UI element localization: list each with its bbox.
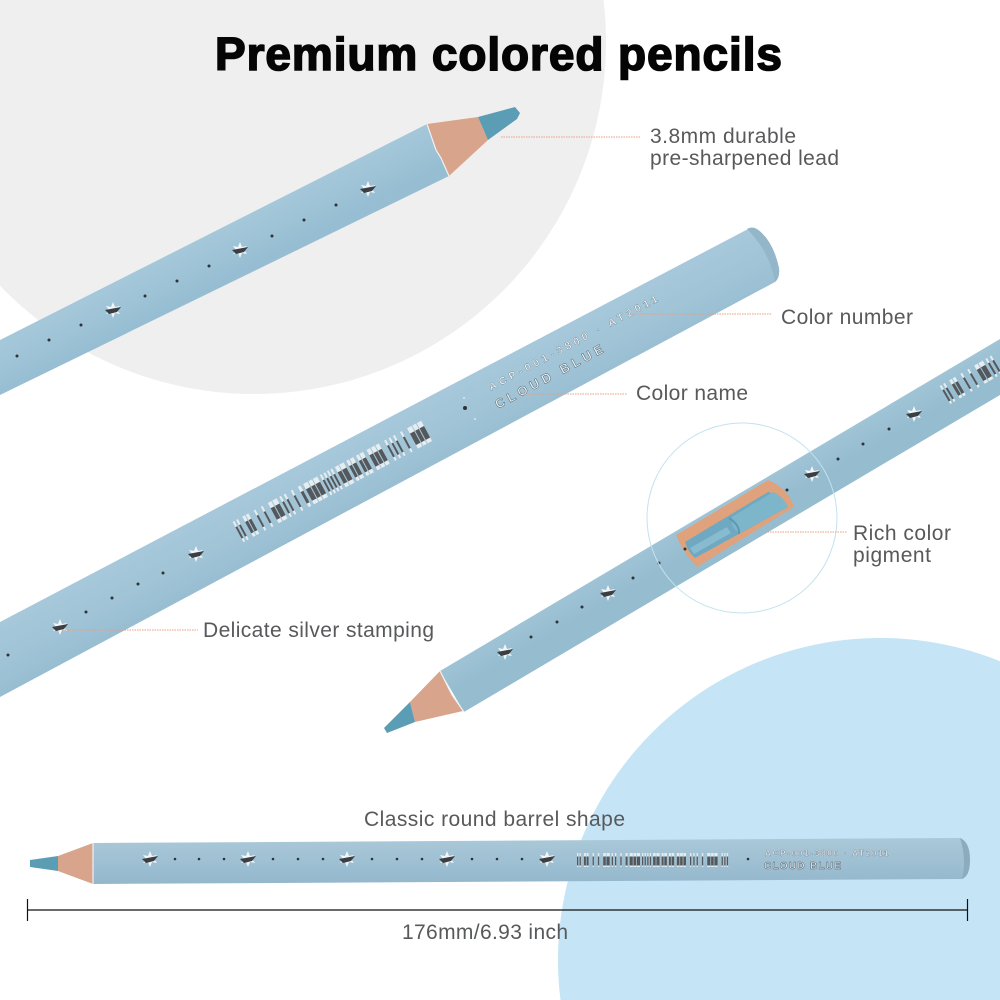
dots bbox=[174, 858, 749, 860]
pencil: large diagonal bbox=[0, 228, 779, 697]
dimension label: 176mm/6.93 inch bbox=[402, 921, 568, 944]
silver stars bbox=[142, 851, 555, 867]
color name stamping: CLOUD BLUE bbox=[492, 341, 607, 412]
callout: silver stamping: Delicate silver stamping bbox=[203, 619, 434, 642]
barcode stamping bbox=[238, 431, 427, 533]
callout: lead: pre-sharpened lead bbox=[650, 147, 839, 170]
silver stars bbox=[497, 406, 922, 660]
color number stamping: ACP-001-3800 · AT2011 bbox=[765, 849, 890, 858]
callout: pigment bbox=[765, 522, 951, 567]
dimension line bbox=[28, 899, 968, 921]
barcode stamping bbox=[577, 860, 729, 861]
title: Premium colored pencils bbox=[215, 28, 782, 80]
background circle: light blue bbox=[558, 638, 1000, 1000]
callout: pigment: Rich color bbox=[853, 522, 951, 545]
silver stars bbox=[52, 546, 204, 635]
pencil: right diagonal with cutaway bbox=[384, 339, 1000, 733]
callout: color name: Color name bbox=[636, 382, 748, 405]
color number stamping: ACP-001-3800 · AT2011 bbox=[487, 292, 662, 394]
dots bbox=[16, 204, 338, 358]
dots bbox=[6, 397, 476, 656]
background circle: gray bbox=[0, 0, 606, 394]
barrel shape label: Classic round barrel shape bbox=[364, 808, 625, 831]
callout: pigment: pigment bbox=[853, 544, 931, 567]
color name stamping: CLOUD BLUE bbox=[764, 861, 842, 872]
pencil: horizontal full length bbox=[30, 838, 970, 884]
callout: lead: 3.8mm durable bbox=[650, 125, 796, 148]
silver stars bbox=[105, 181, 376, 318]
pencil: upper left, sharpened tip bbox=[0, 107, 520, 395]
callout: lead bbox=[501, 125, 839, 170]
callout: color number: Color number bbox=[781, 306, 913, 329]
dots bbox=[530, 428, 890, 638]
barcode stamping bbox=[945, 363, 1000, 396]
cutaway: wood and color core bbox=[676, 480, 794, 567]
magnifier circle bbox=[647, 423, 837, 613]
